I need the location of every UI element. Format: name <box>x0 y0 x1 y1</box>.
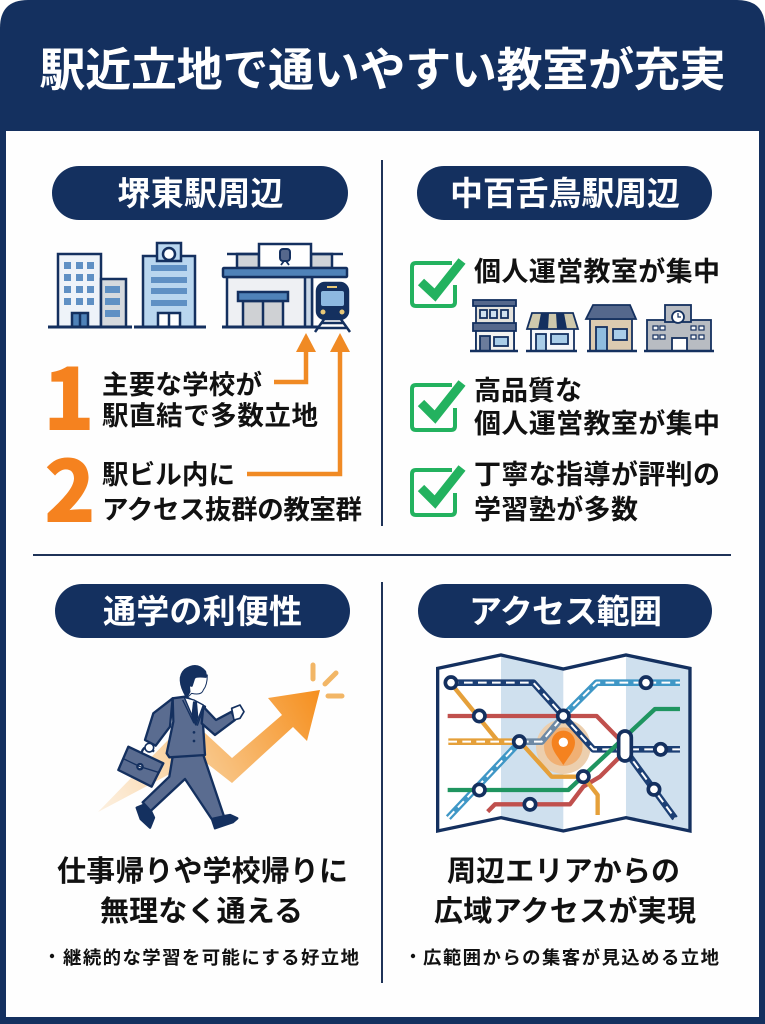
item 2 <box>44 424 362 547</box>
heading pill: 中百舌鳥駅周辺 <box>450 175 680 212</box>
icon: rising arrow <box>98 665 342 812</box>
item 1 <box>43 332 318 455</box>
caption <box>434 856 696 928</box>
item 2: 駅ビル内に <box>102 460 235 490</box>
arrow: from item 2 to train <box>247 333 350 474</box>
icon: school building <box>134 243 206 327</box>
icon: station and train <box>222 244 350 332</box>
item 1: 1 <box>43 332 95 455</box>
shop: awning <box>526 313 578 351</box>
item 1: 主要な学校が <box>102 370 262 400</box>
heading pill: 通学の利便性 <box>103 593 302 630</box>
shop: house <box>586 305 637 351</box>
shop: two storey <box>470 300 518 351</box>
note: 広範囲からの集客が見込める立地 <box>423 947 719 968</box>
icon: shop row <box>470 300 714 351</box>
check item 1: 個人運営教室が集中 <box>474 256 720 287</box>
heading pill: アクセス範囲 <box>469 593 662 630</box>
icon: commuter running with briefcase <box>118 666 244 828</box>
caption: 周辺エリアからの <box>447 856 680 888</box>
item 2: 2 <box>44 424 96 547</box>
heading pill <box>417 166 712 220</box>
check item 2: 高品質な <box>474 376 582 406</box>
check item 3: 学習塾が多数 <box>474 494 638 525</box>
panel: アクセス範囲 <box>411 584 719 968</box>
icon: transit map <box>438 655 690 831</box>
title: 駅近立地で通いやすい教室が充実 <box>40 44 726 96</box>
caption <box>57 855 348 928</box>
icon: office building <box>48 254 132 327</box>
panel: 通学の利便性 <box>50 584 359 968</box>
shop: school <box>644 305 714 351</box>
check item 2 <box>412 376 720 439</box>
check item 1 <box>412 256 720 306</box>
item 1: 駅直結で多数立地 <box>102 401 318 431</box>
arrow: from item 1 to station <box>274 333 316 382</box>
caption: 無理なく通える <box>100 895 303 928</box>
panel: 中百舌鳥駅周辺 <box>412 166 720 525</box>
check item 3 <box>412 459 720 525</box>
note: 継続的な学習を可能にする好立地 <box>63 947 359 968</box>
check item 3: 丁寧な指導が評判の <box>474 459 720 490</box>
panel: 堺東駅周辺 <box>43 166 362 547</box>
dividers <box>33 160 731 983</box>
heading pill <box>52 166 348 220</box>
heading pill <box>418 584 712 638</box>
item 2: アクセス抜群の教室群 <box>102 495 362 525</box>
caption: 広域アクセスが実現 <box>434 894 696 928</box>
caption: 仕事帰りや学校帰りに <box>57 855 348 888</box>
check item 2: 個人運営教室が集中 <box>474 408 720 439</box>
heading pill: 堺東駅周辺 <box>118 175 284 212</box>
heading pill <box>55 584 350 638</box>
